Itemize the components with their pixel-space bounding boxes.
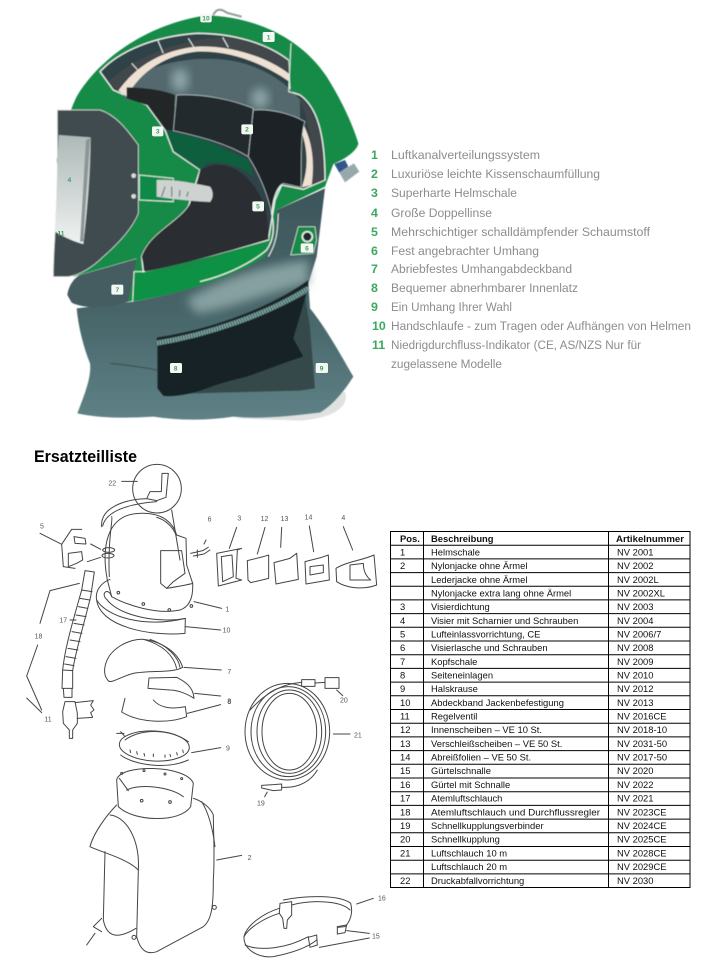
item 4: Große Doppellinse <box>391 206 492 220</box>
table rows: Nylonjacke extra lang ohne Ärmel <box>431 588 571 598</box>
comfort padding <box>127 87 175 130</box>
feature list <box>371 148 691 371</box>
table rows: 15 <box>400 765 410 776</box>
item 3: 3 <box>371 186 378 200</box>
table rows: NV 2017-50 <box>617 752 667 762</box>
part 7 head cushion <box>105 639 231 682</box>
table rows: Kopfschale <box>431 656 477 667</box>
item 10: Handschlaufe - zum Tragen oder Aufhängen von Helmen <box>391 319 691 333</box>
part 11 regulator valve <box>27 698 94 738</box>
table rows: Schnellkupplungsverbinder <box>431 820 544 831</box>
part 9 neck ruff: 9 <box>226 745 230 752</box>
table rows: 13 <box>400 738 410 749</box>
item 6: Fest angebrachter Umhang <box>391 244 539 258</box>
table rows: 5 <box>400 628 405 640</box>
table rows: 12 <box>400 724 410 735</box>
upper parts <box>27 464 377 710</box>
table rows: Halskrause <box>431 683 478 694</box>
table rows: 18 <box>400 806 410 818</box>
table rows: 14 <box>400 752 410 762</box>
table rows: NV 2002 <box>617 560 653 571</box>
number tags: 2 <box>245 127 249 134</box>
cape inner lining <box>157 297 315 396</box>
number tags: 11 <box>57 231 65 238</box>
part 22 pressure drop device: 22 <box>108 480 116 487</box>
item 5: Mehrschichtiger schalldämpfender Schaumstoff <box>391 225 651 239</box>
part 8 side inserts lower <box>122 698 231 721</box>
table rows: 21 <box>400 848 410 858</box>
part 1 helmet shell <box>102 513 229 613</box>
table rows: Visierlasche und Schrauben <box>431 642 548 653</box>
item 7: Abriebfestes Umhangabdeckband <box>391 262 572 276</box>
item 7: 7 <box>371 262 378 276</box>
table rows: NV 2020 <box>617 765 653 776</box>
part 9 neck ruff <box>117 729 230 765</box>
table rows: Luftschlauch 10 m <box>431 848 507 858</box>
table rows: 6 <box>400 642 405 653</box>
number tags: 1 <box>267 34 271 41</box>
table rows: 4 <box>400 615 405 626</box>
table rows: Druckabfallvorrichtung <box>431 875 524 886</box>
part 4 visor: 4 <box>341 515 345 522</box>
table rows: NV 2013 <box>617 697 653 708</box>
heading: Ersatzteilliste <box>34 448 137 466</box>
number tags: 3 <box>156 129 160 136</box>
part 20 quick coupling <box>250 678 348 710</box>
part 12 inner lens: 12 <box>261 516 269 523</box>
table rows: Schnellkupplung <box>431 834 500 844</box>
part 21 air hose coil <box>245 683 362 787</box>
table rows: NV 2023CE <box>617 806 667 818</box>
item 4: 4 <box>371 206 378 220</box>
table rows: Helmschale <box>431 546 480 558</box>
item 3: Superharte Helmschale <box>391 186 517 200</box>
table rows: Regelventil <box>431 710 477 722</box>
number tags: 7 <box>115 287 119 294</box>
part 1 helmet shell: 1 <box>225 606 229 613</box>
part 8 side inserts upper: 8 <box>227 698 231 705</box>
lens <box>55 135 91 244</box>
table rows: NV 2028CE <box>617 848 667 858</box>
table rows: Atemluftschlauch <box>431 792 502 804</box>
table rows: Visierdichtung <box>431 601 490 612</box>
part 10 cover band <box>96 579 231 635</box>
item 2: Luxuriöse leichte Kissenschaumfüllung <box>391 167 600 181</box>
table rows: NV 2030 <box>617 875 653 886</box>
table rows: NV 2018-10 <box>617 724 667 735</box>
table rows: Luftschlauch 20 m <box>431 861 507 872</box>
rivets <box>131 173 136 178</box>
item 9: Ein Umhang Ihrer Wahl <box>391 300 512 314</box>
table rows <box>400 546 667 886</box>
table rows: 3 <box>400 601 405 612</box>
part 18 bracket: 18 <box>35 634 43 641</box>
table rows: NV 2006/7 <box>617 628 661 640</box>
item 6: 6 <box>371 244 378 258</box>
hood cape <box>77 188 353 420</box>
air channel strip <box>108 37 289 91</box>
table rows: 22 <box>400 875 410 886</box>
part 5 air inlet <box>40 524 101 568</box>
helmet illustration <box>53 10 359 421</box>
part 14 peel-off film <box>305 514 329 584</box>
table rows: 19 <box>400 820 410 831</box>
part 6 visor tab <box>191 516 212 557</box>
table rows: NV 2003 <box>617 601 653 612</box>
part 21 air hose coil: 21 <box>354 733 362 740</box>
item 9: 9 <box>371 300 378 314</box>
part 7 head cushion: 7 <box>227 669 231 676</box>
table rows: NV 2004 <box>617 615 653 626</box>
part 3 visor seal: 3 <box>237 516 241 523</box>
table rows: NV 2025CE <box>617 834 667 844</box>
part 2 jacket: 2 <box>248 855 252 862</box>
part 11 regulator valve: 11 <box>44 717 52 724</box>
table rows: 1 <box>400 546 405 558</box>
part 2 jacket <box>87 768 252 953</box>
number tags: 9 <box>320 365 324 372</box>
table rows: Nylonjacke ohne Ärmel <box>431 560 527 571</box>
shoulder band <box>67 258 138 307</box>
table rows: Seiteneinlagen <box>431 670 493 680</box>
part 20 quick coupling: 20 <box>340 697 348 704</box>
table rows: NV 2009 <box>617 656 653 667</box>
item 1: 1 <box>371 148 378 162</box>
item 11: 11 <box>372 338 385 352</box>
item 11 <box>372 338 641 371</box>
part 22 pressure drop device <box>102 464 181 560</box>
part 17 breathing hose <box>59 571 94 697</box>
hand strap ring <box>213 10 242 17</box>
number tags: 5 <box>256 204 260 211</box>
number tags: 6 <box>305 245 309 252</box>
table rows: 7 <box>400 656 405 667</box>
exploded parts diagram <box>27 464 386 957</box>
part 18 bracket <box>27 583 79 710</box>
item 5: 5 <box>371 225 378 239</box>
part 17 breathing hose: 17 <box>59 617 67 624</box>
table rows: NV 2012 <box>617 683 653 694</box>
lower parts <box>27 678 386 957</box>
part 6 visor tab: 6 <box>208 516 212 523</box>
part 19 connector <box>257 784 282 807</box>
table rows: 9 <box>400 683 405 694</box>
table rows: 17 <box>400 792 410 804</box>
number tags <box>57 14 328 373</box>
table rows: 2 <box>400 560 405 571</box>
part 8 side inserts upper <box>148 677 231 705</box>
item 1: Luftkanalverteilungssystem <box>391 148 540 162</box>
item 10: 10 <box>372 319 386 333</box>
number tags: 10 <box>202 15 210 22</box>
table rows: 11 <box>400 710 410 722</box>
table rows: Gürtelschnalle <box>431 765 491 776</box>
table rows: Lederjacke ohne Ärmel <box>431 574 527 585</box>
table header <box>400 533 684 544</box>
zip and bib <box>157 293 307 396</box>
badge <box>291 227 317 255</box>
floor shadow <box>233 392 346 421</box>
part 13 wear lens: 13 <box>281 516 289 523</box>
table header: Beschreibung <box>431 533 494 544</box>
number tags: 4 <box>67 177 71 184</box>
table rows: NV 2008 <box>617 642 653 653</box>
table rows: Visier mit Scharnier und Schrauben <box>431 615 578 626</box>
table rows: Verschleißscheiben – VE 50 St. <box>431 738 562 749</box>
table rows: NV 2029CE <box>617 861 667 872</box>
table rows: NV 2016CE <box>617 710 667 722</box>
table rows: Abreißfolien – VE 50 St. <box>431 752 531 762</box>
part 3 visor seal <box>217 516 242 586</box>
air connector <box>334 160 348 173</box>
part 12 inner lens <box>247 516 269 583</box>
part 13 wear lens <box>274 516 298 584</box>
table grid <box>390 531 690 888</box>
table rows: Lufteinlassvorrichtung, CE <box>431 628 540 640</box>
table rows: NV 2024CE <box>617 820 667 831</box>
table rows: NV 2010 <box>617 670 653 680</box>
part 4 visor <box>336 515 377 588</box>
part 8 side inserts lower: 8 <box>227 699 231 706</box>
table rows: Gürtel mit Schnalle <box>431 779 510 790</box>
item 8: 8 <box>371 281 378 295</box>
part 5 air inlet: 5 <box>40 524 44 531</box>
table rows: 10 <box>400 697 410 708</box>
table rows: 20 <box>400 834 410 844</box>
table rows: NV 2002XL <box>617 588 665 598</box>
table rows: 16 <box>400 779 410 790</box>
part 10 cover band: 10 <box>223 628 231 635</box>
table rows: NV 2022 <box>617 779 653 790</box>
table rows: Atemluftschlauch und Durchflussregler <box>431 806 600 818</box>
visor strap <box>139 175 173 202</box>
parts 15 and 16 belt: 16 <box>378 895 386 902</box>
part 14 peel-off film: 14 <box>305 514 313 521</box>
part 19 connector: 19 <box>257 800 265 807</box>
table rows: NV 2021 <box>617 792 653 804</box>
parts 15 and 16 belt: 15 <box>372 933 380 940</box>
number tags: 8 <box>174 365 178 372</box>
table header: Artikelnummer <box>616 533 684 544</box>
table rows: NV 2001 <box>617 546 653 558</box>
table header: Pos. <box>400 533 420 544</box>
table rows: Innenscheiben – VE 10 St. <box>431 724 542 735</box>
item 2: 2 <box>371 167 378 181</box>
spare parts table <box>390 531 690 888</box>
table rows: 8 <box>400 670 405 680</box>
visor <box>53 110 138 277</box>
green shell <box>57 15 358 302</box>
ear foam <box>142 165 268 272</box>
table rows: NV 2002L <box>617 574 659 585</box>
table rows: Abdeckband Jackenbefestigung <box>431 697 564 708</box>
item 11: Niedrigdurchfluss-Indikator (CE, AS/NZS Nur für <box>391 338 641 352</box>
item 8: Bequemer abnerhmbarer Innenlatz <box>391 281 578 295</box>
item 11: zugelassene Modelle <box>391 357 502 371</box>
parts 15 and 16 belt <box>244 895 386 957</box>
interior lining <box>100 33 325 272</box>
table rows: NV 2031-50 <box>617 738 667 749</box>
